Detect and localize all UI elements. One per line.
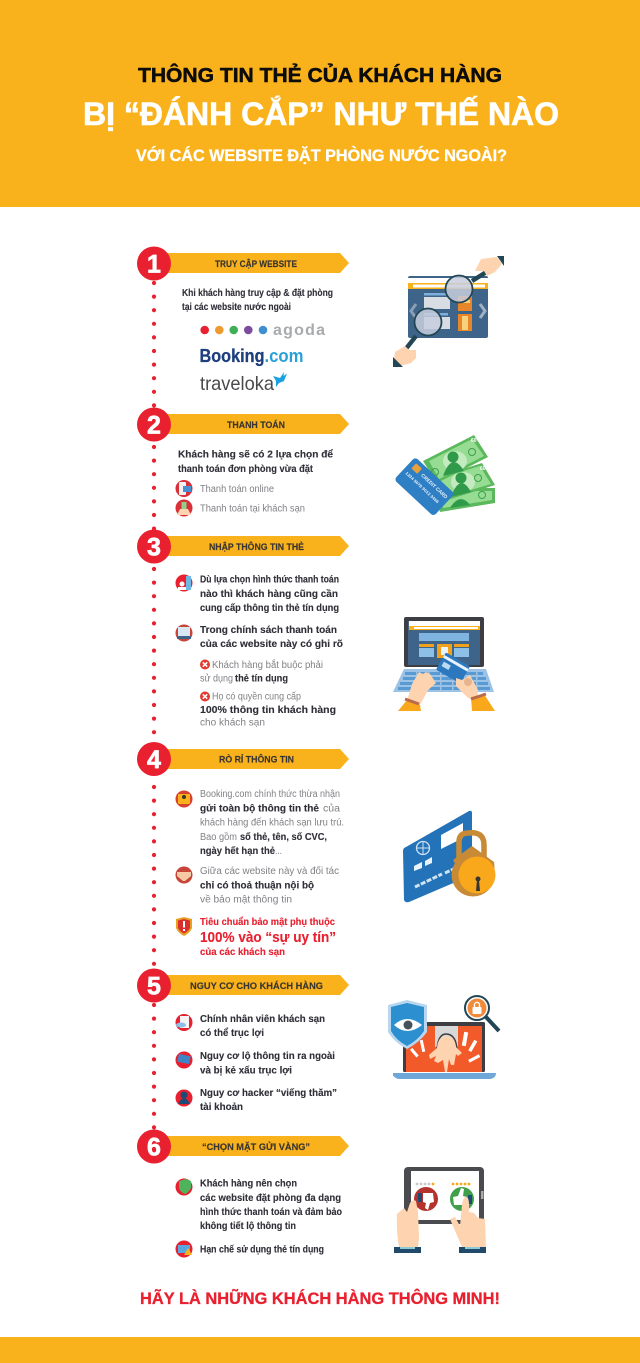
text: booking.com thừa nhận: ... (275, 846, 282, 857)
step 1 header (137, 246, 349, 280)
advice: hạn chế thẻ tín dụng (176, 1240, 324, 1258)
step 3 header (137, 530, 349, 564)
logo: booking.com: .com (264, 345, 304, 366)
risk: hacker: Nguy cơ hacker “viếng thăm” (200, 1088, 337, 1099)
text: booking.com thừa nhận: Bao gồm (200, 832, 237, 843)
step 5 header: 5 (147, 972, 161, 1000)
risk: hacker (176, 1088, 337, 1113)
risk: nhân viên khách sạn: có thể trục lợi (200, 1028, 264, 1039)
footer bar (0, 1337, 640, 1363)
advice: chọn website: không tiết lộ thông tin (200, 1221, 296, 1232)
step 1 header: 1 (147, 250, 161, 278)
title line 2: BỊ “ĐÁNH CẮP” NHƯ THẾ NÀO (83, 96, 559, 132)
text: chính sách: Trong chính sách thanh toán (200, 625, 337, 636)
icon: warning shield (176, 917, 192, 936)
timeline dots (152, 281, 156, 1129)
text: thông tin thẻ: nào thì khách hàng cũng cần (200, 589, 338, 600)
text: tiêu chuẩn bảo mật: Tiêu chuẩn bảo mật phụ thuộc (200, 917, 336, 928)
step 1 header: TRUY CẬP WEBSITE (215, 258, 297, 270)
note: 100% thông tin: cho khách sạn (200, 718, 265, 728)
illustration: hacked laptop with shield and magnifier (388, 996, 499, 1079)
illustration: credit card and cash: CREDIT CARD (419, 473, 449, 501)
text: booking.com thừa nhận: Booking.com chính thức thừa nhận (200, 789, 340, 800)
logo: booking.com: Booking (200, 345, 264, 366)
note: bắt buộc thẻ tín dụng: thẻ tín dụng (235, 674, 288, 684)
title line 1: THÔNG TIN THẺ CỦA KHÁCH HÀNG (138, 63, 502, 87)
text: booking.com thừa nhận (200, 789, 344, 857)
note: 100% thông tin (200, 692, 336, 728)
logo: traveloka: traveloka (200, 373, 274, 395)
step 6 header (137, 1130, 349, 1164)
icon: handshake (176, 866, 192, 884)
text: booking.com thừa nhận: khách hàng đến khách sạn lưu trú. (200, 818, 344, 828)
step 2 header (137, 408, 349, 442)
text: thông tin thẻ (200, 574, 339, 614)
step 5 header: NGUY CƠ CHO KHÁCH HÀNG (190, 981, 323, 992)
option: thanh toán online (176, 480, 274, 497)
illustration: laptop and card (393, 617, 495, 711)
option: thanh toán online: Thanh toán online (200, 484, 274, 495)
illustration: credit card and cash: 1234 5678 9012 3456 (404, 471, 441, 505)
illustration: tablet with ratings (394, 1167, 486, 1253)
step 4 header: RÒ RỈ THÔNG TIN (219, 754, 294, 766)
note: bắt buộc thẻ tín dụng: sử dụng (200, 674, 233, 684)
icon: envelope eye (176, 790, 192, 808)
icon: id card (176, 574, 192, 592)
logo: agoda: agoda (273, 322, 325, 339)
text: thông tin thẻ: Dù lựa chọn hình thức thanh toán (200, 574, 339, 586)
advice: chọn website: các website đặt phòng đa dạng (200, 1193, 341, 1204)
text: booking.com thừa nhận: của (323, 804, 341, 814)
note: bắt buộc thẻ tín dụng: Khách hàng bắt buộc phải (212, 660, 323, 671)
step 6 header: 6 (147, 1134, 161, 1162)
text: tiêu chuẩn bảo mật (200, 917, 336, 958)
text: booking.com thừa nhận: gửi toàn bộ thông tin thẻ (200, 804, 320, 814)
step 1 text: tại các website nước ngoài (182, 302, 291, 313)
step 3 header: 3 (147, 534, 161, 562)
step 1 text (182, 288, 333, 313)
section 6: chọn mặt gửi vàng (137, 1130, 486, 1258)
step 6 header: “CHỌN MẶT GỬI VÀNG” (202, 1141, 310, 1153)
step 5 header (137, 968, 349, 1002)
illustration: credit card and cash (394, 435, 495, 516)
step 2 text: thanh toán đơn phòng vừa đặt (178, 464, 314, 475)
step 4 header: 4 (147, 746, 161, 774)
text: thoả thuận nội bộ: về bảo mật thông tin (200, 894, 292, 906)
option: thanh toán tại khách sạn (176, 500, 305, 516)
icon: policy document (176, 624, 192, 642)
step 2 text (178, 450, 334, 475)
step 2 text: Khách hàng sẽ có 2 lựa chọn để (178, 450, 334, 460)
closing call to action: HÃY LÀ NHỮNG KHÁCH HÀNG THÔNG MINH! (140, 1288, 500, 1308)
illustration: website under magnifiers (393, 256, 504, 367)
text: chính sách: của các website này có ghi rõ (200, 639, 343, 650)
text: booking.com thừa nhận: số thẻ, tên, số CVC, (240, 832, 327, 843)
illustration: credit card and cash: 60 (480, 466, 486, 472)
section 2: thanh toán (137, 408, 495, 516)
text: booking.com thừa nhận: ngày hết hạn thẻ (200, 846, 276, 857)
risk: lộ thông tin: và bị kẻ xấu trục lợi (200, 1066, 292, 1076)
advice: hạn chế thẻ tín dụng: Hạn chế sử dụng thẻ tín dụng (200, 1244, 324, 1256)
step 3 header: NHẬP THÔNG TIN THẺ (209, 541, 304, 553)
text: thoả thuận nội bộ: Giữa các website này và đối tác (200, 866, 339, 877)
risk: lộ thông tin (176, 1051, 335, 1076)
section 5: nguy cơ cho khách hàng (137, 968, 499, 1113)
risk: nhân viên khách sạn (176, 1014, 325, 1039)
note: 100% thông tin: 100% thông tin khách hàng (200, 704, 336, 716)
risk: hacker: tài khoản (200, 1102, 243, 1113)
text: chính sách (200, 625, 343, 650)
option: thanh toán tại khách sạn: Thanh toán tại khách sạn (200, 504, 305, 514)
section 1: truy cập website (137, 246, 504, 395)
text: tiêu chuẩn bảo mật: 100% vào “sự uy tín” (200, 929, 336, 946)
step 2 header: THANH TOÁN (227, 420, 285, 431)
advice: chọn website: Khách hàng nên chọn (200, 1178, 297, 1190)
note: 100% thông tin: Họ có quyền cung cấp (212, 692, 301, 702)
note: bắt buộc thẻ tín dụng (200, 660, 323, 684)
step 4 header (137, 742, 349, 776)
illustration: card with padlock (403, 811, 496, 902)
section 4: rò rỉ thông tin (137, 742, 496, 958)
text: thoả thuận nội bộ (200, 866, 339, 906)
step 1 text: Khi khách hàng truy cập & đặt phòng (182, 288, 333, 299)
illustration: credit card and cash: 60 (471, 438, 477, 444)
advice: chọn website (176, 1178, 342, 1232)
logo: agoda (200, 322, 325, 339)
header banner (0, 0, 640, 207)
step 2 header: 2 (147, 412, 161, 440)
text: thông tin thẻ: cung cấp thông tin thẻ tín dụng (200, 603, 339, 614)
text: thoả thuận nội bộ: chỉ có thoả thuận nội bộ (200, 880, 314, 892)
title line 3: VỚI CÁC WEBSITE ĐẶT PHÒNG NƯỚC NGOÀI? (136, 146, 507, 165)
section 3: nhập thông tin thẻ (137, 530, 495, 728)
advice: chọn website: hình thức thanh toán và đảm bảo (200, 1207, 342, 1218)
text: tiêu chuẩn bảo mật: của các khách sạn (200, 947, 285, 958)
risk: lộ thông tin: Nguy cơ lộ thông tin ra ngoài (200, 1051, 335, 1062)
risk: nhân viên khách sạn: Chính nhân viên khách sạn (200, 1014, 325, 1025)
